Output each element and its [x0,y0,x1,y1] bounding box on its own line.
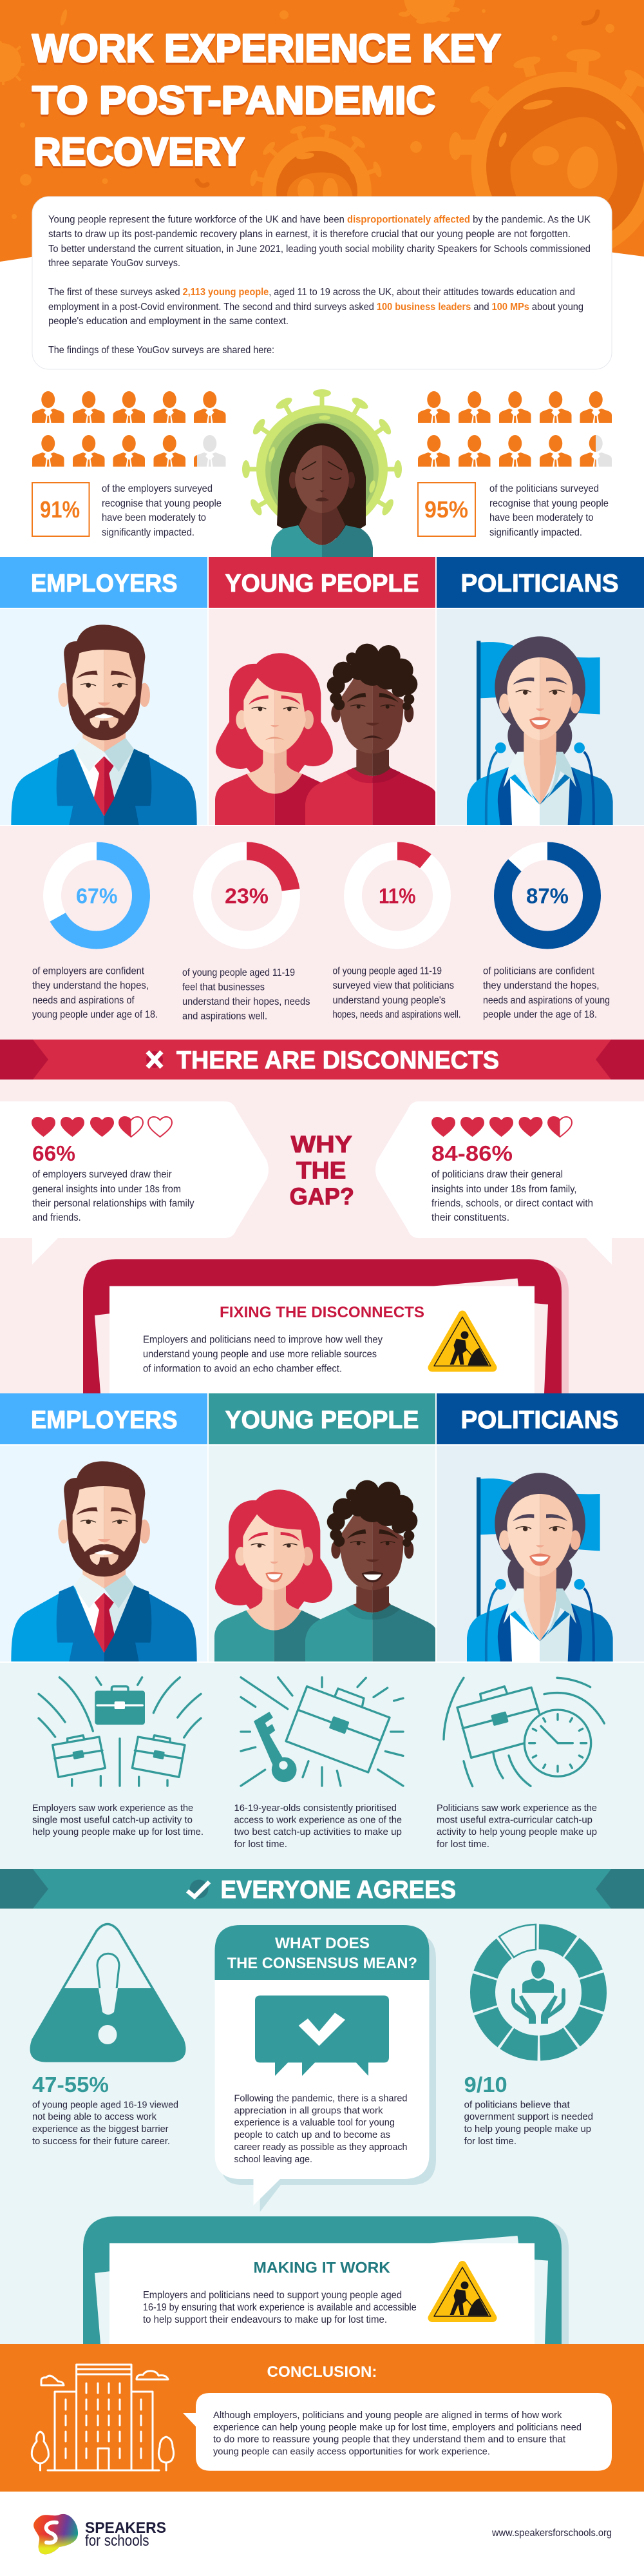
panel: employers gap: their personal relationships with family [32,1198,194,1209]
text: young people on politicians: of young people aged 11-19 [332,965,442,977]
pink section background [0,826,644,1393]
text: politicians confident: people under the age of 18. [483,1009,597,1020]
intro text [48,214,591,356]
intro text: employment in a post-Covid environment. The second and third surveys asked 100 business leaders and 100 MPs about young [48,302,583,313]
column headers: first set [0,557,644,608]
text: young people on politicians: hopes, needs and aspirations well. [332,1009,461,1020]
stat 91%: 91% [40,496,80,523]
text: politicians on work experience: activity to help young people make up [437,1827,597,1837]
donut: 87% politicians: 87% [526,884,569,907]
text: fixing advice: Employers and politicians need to improve how well they [143,1334,383,1346]
stat 47-55%: of young people aged 16-19 viewed [32,2100,178,2110]
panel: politicians gap [375,1101,644,1264]
text: making it work advice: Employers and politicians need to support young people aged [143,2290,402,2301]
panel: conclusion [0,2344,644,2492]
politician person pictogram [418,391,612,467]
panel: fixing the disconnects [83,1259,569,1393]
stat 95%: recognise that young people [489,498,609,509]
stat 95%: significantly impacted. [489,527,582,538]
text: politicians confident: of politicians are confident [483,965,595,977]
text: politicians confident: they understand the hopes, [483,980,599,991]
text: making it work advice [143,2290,417,2325]
text: young people on businesses: of young people aged 11-19 [182,967,295,978]
stat 9/10: 9/10 [464,2073,507,2097]
text: consensus explanation: career ready as possible as they approach [234,2142,407,2153]
stat 95%: have been moderately to [489,512,594,523]
stat 9/10: for lost time. [464,2136,516,2147]
text: employers confident [32,965,158,1020]
text: 16-19-year-olds on work experience: 16-19-year-olds consistently prioritised [234,1803,397,1814]
hearts rating [32,1117,172,1137]
panel: politicians gap: their constituents. [431,1212,509,1223]
text: politicians confident [483,965,610,1020]
text: young people on businesses: understand their hopes, needs [182,996,310,1007]
stat 9/10: of politicians believe that [464,2100,570,2110]
title: TO POST-PANDEMIC [32,79,435,122]
panel: politicians gap: friends, schools, or direct contact with [431,1198,593,1209]
title [32,26,501,174]
stat 91%: recognise that young people [102,498,222,509]
text: politicians on work experience: Politicians saw work experience as the [437,1803,597,1814]
text: young people on businesses: feel that businesses [182,982,265,993]
text: young people on politicians [332,965,461,1020]
logo: speakers for schools: for schools [85,2532,149,2550]
intro panel [32,197,612,369]
panel: politicians gap: of politicians draw their general [431,1169,563,1180]
panel: employer portrait [0,609,207,825]
panel: politician portrait second [437,1446,644,1661]
stat 95% [418,483,609,538]
panel: young people portraits (smiling) [209,1446,435,1661]
speech bubble: what does the consensus mean: THE CONSENSUS MEAN? [227,1955,417,1972]
icon: segmented ring with supported person [482,1924,595,2049]
title: WORK EXPERIENCE KEY [32,26,501,70]
title: RECOVERY [33,130,245,174]
speech bubble: what does the consensus mean: WHAT DOES [275,1935,370,1952]
icon: road works sign [432,2265,493,2318]
text: making it work advice: 16-19 by ensuring that work experience is available and accessible [143,2302,417,2313]
panel: employers gap [0,1101,269,1264]
header background [0,0,644,262]
intro text: people's education and employment in the same context. [48,316,289,327]
column headers: first set: YOUNG PEOPLE [225,570,419,597]
donut: 67% employers [52,851,141,940]
intro text: The findings of these YouGov surveys are shared here: [48,345,274,356]
text: young people on businesses: and aspirations well. [182,1011,267,1022]
text: 16-19-year-olds on work experience: two best catch-up activities to make up [234,1827,402,1837]
text: 16-19-year-olds on work experience: for lost time. [234,1839,287,1850]
intro text: three separate YouGov surveys. [48,258,180,269]
donut: 87% politicians [503,851,592,940]
text: fixing advice [143,1334,383,1374]
text: making it work advice: to help support their endeavours to make up for lost time. [143,2314,387,2325]
text: young people on businesses [182,967,310,1022]
text: consensus explanation: school leaving age. [234,2155,312,2165]
column headers: first set: POLITICIANS [461,570,618,597]
heading: why the gap [290,1131,354,1210]
stat 47-55%: experience as the biggest barrier [32,2124,169,2135]
text: employers on work experience: single most useful catch-up activity to [32,1816,193,1826]
banner: everyone agrees: EVERYONE AGREES [220,1876,456,1904]
banner: there are disconnects [0,1040,644,1080]
stat 47-55%: not being able to access work [32,2112,157,2122]
stat 91% [32,483,222,538]
panel: politicians gap: 84-86% [431,1141,513,1165]
text: fixing advice: of information to avoid an echo chamber effect. [143,1364,342,1374]
panel: employers gap: 66% [32,1141,75,1165]
text: fixing advice: understand young people and use more reliable sources [143,1349,377,1360]
icon: tick [187,1879,209,1899]
text: 16-19-year-olds on work experience [234,1803,402,1850]
column headers: first set: EMPLOYERS [31,570,178,597]
text: politicians confident: needs and aspirations of young [483,995,610,1006]
intro text: The first of these surveys asked 2,113 young people, aged 11 to 19 across the UK, about their attitudes towards education and [48,287,575,298]
speech bubble: conclusion text [183,2393,612,2471]
text: employers on work experience: help young people make up for lost time. [32,1827,204,1837]
icon: rainbow blob [33,2514,78,2554]
website url: www.speakersforschools.org [491,2528,612,2539]
stat 91%: have been moderately to [102,512,206,523]
stat 95%: of the politicians surveyed [489,483,599,494]
logo: speakers for schools: SPEAKERS [85,2519,166,2537]
stat 47-55% [32,2073,178,2147]
speech bubble: conclusion text: young people can easily access opportunities for work experience. [213,2446,490,2457]
panel: politician portrait [437,609,644,825]
text: young people on politicians: understand young people's [332,995,446,1006]
text: 16-19-year-olds on work experience: access to work experience as one of the [234,1816,402,1826]
intro text: To better understand the current situation, in June 2021, leading youth social mobility charity Speakers for Schools commissioned [48,244,591,255]
icon: office building [32,2365,174,2470]
stat 95%: 95% [424,496,468,523]
stat 47-55%: 47-55% [32,2073,109,2097]
donut: 11% young people: 11% [379,884,416,907]
banner: everyone agrees [0,1869,644,1909]
mint section background [0,1663,644,2344]
stat 9/10: government support is needed [464,2112,593,2122]
panel: employers gap: general insights into under 18s from [32,1184,181,1195]
panel: young people portraits (sad) [209,609,435,825]
donut: 23% young people: 23% [225,884,269,907]
big virus [449,49,644,261]
stat 91%: of the employers surveyed [102,483,213,494]
text: politicians on work experience [437,1803,597,1850]
icon: briefcase and clock [444,1678,604,1787]
stat 9/10 [464,2073,593,2147]
icon: cross [146,1051,163,1068]
intro text: starts to draw up its post-pandemic recovery plans in earnest, it is therefore crucial that our young people are not forgotten. [48,229,571,240]
column headers: second set: POLITICIANS [461,1406,618,1434]
icon: key and briefcase [241,1678,403,1786]
speech bubble: conclusion text: experience can help young people make up for lost time, employers and politicians need [213,2423,582,2433]
speech bubble: conclusion text: to do more to reassure young people that they understand them and to ensure that [213,2435,565,2445]
panel: employers gap: and friends. [32,1212,81,1223]
panel: employer portrait second [0,1446,207,1661]
column headers: second set [0,1393,644,1444]
donut: 67% employers: 67% [76,884,117,907]
heading: why the gap: GAP? [290,1183,354,1210]
panel: making it work [83,2216,569,2344]
decorative viruses [0,0,644,261]
banner: there are disconnects: THERE ARE DISCONNECTS [176,1047,499,1074]
stat 47-55%: to success for their future career. [32,2136,170,2147]
panel: making it work: MAKING IT WORK [254,2260,391,2277]
speech bubble: conclusion text: Although employers, politicians and young people are aligned in terms of how work [213,2410,562,2421]
text: young people on politicians: surveyed view that politicians [332,980,454,991]
donut: 11% young people [353,851,442,940]
text: consensus explanation: appreciation in all groups that work [234,2106,383,2116]
text: employers on work experience [32,1803,204,1837]
text: employers on work experience: Employers saw work experience as the [32,1803,193,1814]
column headers: second set: YOUNG PEOPLE [225,1406,419,1434]
panel: politicians gap: insights into under 18s from family, [431,1184,577,1195]
panel: conclusion: CONCLUSION: [267,2363,377,2381]
text: politicians on work experience: for lost time. [437,1839,489,1850]
text: employers confident: needs and aspirations of [32,995,135,1006]
donut: 23% young people [202,851,291,940]
icon: speech bubble tick [255,1995,389,2076]
small virus [249,123,383,246]
panel: employers gap: of employers surveyed draw their [32,1169,172,1180]
hearts rating [431,1117,572,1137]
icon: sad woman with virus halo [242,389,402,557]
logo: speakers for schools [33,2514,166,2554]
stat 91%: significantly impacted. [102,527,194,538]
text: employers confident: of employers are confident [32,965,145,977]
panel: fixing the disconnects: FIXING THE DISCONNECTS [220,1304,424,1321]
text: employers confident: young people under age of 18. [32,1009,158,1020]
intro text: Young people represent the future workforce of the UK and have been disproportionately affected by the pandemic. As the UK [48,214,591,226]
stat 9/10: to help young people make up [464,2124,591,2135]
employer person pictogram [32,391,225,467]
icon: road works sign [432,1315,493,1368]
icon: three briefcases [39,1678,201,1786]
heading: why the gap: WHY [291,1131,352,1157]
icon: warning triangle part filled [31,1924,185,2061]
speech bubble: what does the consensus mean [215,1925,436,2212]
text: politicians on work experience: most useful extra-curricular catch-up [437,1816,592,1826]
heading: why the gap: THE [296,1157,346,1183]
text: consensus explanation [234,2094,407,2165]
text: consensus explanation: Following the pandemic, there is a shared [234,2094,407,2104]
text: consensus explanation: people to catch up and to become as [234,2130,390,2140]
text: consensus explanation: experience is a valuable tool for young [234,2118,395,2128]
text: employers confident: they understand the hopes, [32,980,149,991]
column headers: second set: EMPLOYERS [31,1406,178,1434]
